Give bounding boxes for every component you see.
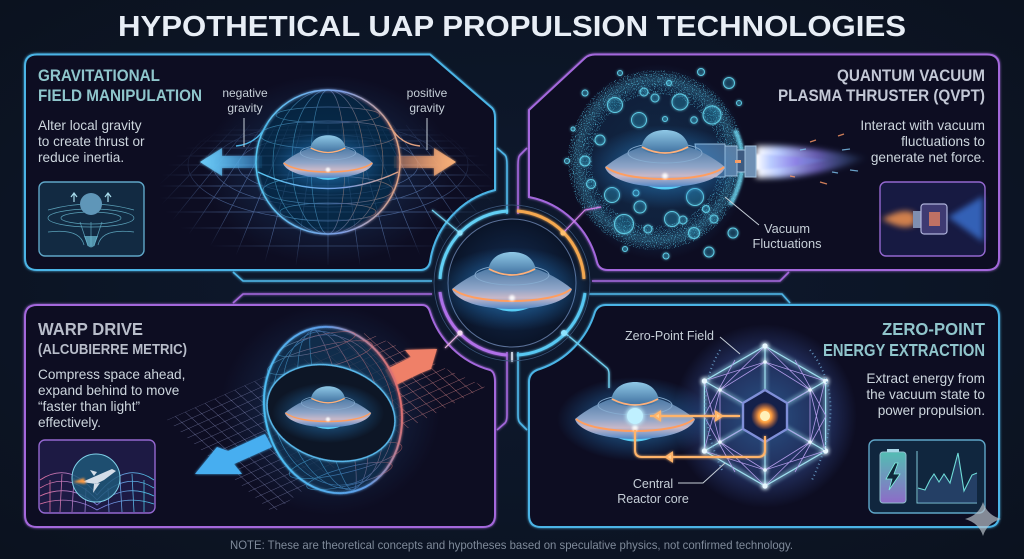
panel: gravitational field manipulation: [22, 52, 498, 273]
heading: [38, 67, 202, 105]
inset: warp bubble ship: [39, 440, 155, 513]
label: positive gravity: positive: [407, 86, 448, 100]
arc: purple lower left: [440, 292, 507, 355]
inset: thruster: [880, 182, 985, 256]
panel: warp drive: [25, 305, 495, 527]
sparkle mark: [965, 502, 1001, 536]
title: HYPOTHETICAL UAP PROPULSION TECHNOLOGIES: [118, 11, 906, 43]
description: Alter local gravity: [38, 118, 142, 133]
plasma plume: [756, 134, 868, 184]
description: effectively.: [38, 415, 101, 430]
gravity sphere: [236, 90, 420, 234]
craft: [557, 377, 713, 461]
label: negative gravity: negative: [222, 86, 268, 100]
description: reduce inertia.: [38, 150, 124, 165]
description: Extract energy from: [866, 371, 985, 386]
inset: gravity well: [39, 182, 144, 256]
panel frame: [25, 54, 495, 270]
label: vacuum fluctuations: [725, 197, 822, 251]
label: zero-point field: [625, 329, 740, 354]
description: [866, 371, 985, 418]
connector lines around the hub: [233, 148, 800, 430]
description: Compress space ahead,: [38, 367, 185, 382]
central hub: [432, 205, 601, 361]
description: [38, 367, 185, 430]
connector wire: [565, 333, 609, 388]
panel: zero-point energy extraction: [529, 305, 999, 527]
heading: [823, 319, 985, 360]
inset: battery and power chart: [869, 440, 985, 513]
particle cloud: [568, 64, 748, 260]
arrow: backward: [195, 434, 272, 474]
panel frame: [529, 54, 999, 270]
haze: [203, 75, 453, 265]
arrow: positive gravity: [394, 148, 456, 176]
label: positive gravity: gravity: [409, 101, 445, 115]
craft: [270, 132, 386, 194]
energy flow arrows: [635, 412, 765, 461]
panel: quantum vacuum plasma thruster: [529, 54, 999, 270]
label: positive gravity: [407, 86, 448, 150]
central craft: [434, 247, 590, 331]
thruster nozzle: [695, 144, 756, 177]
arc: cyan upper left: [440, 211, 508, 279]
description: generate net force.: [871, 150, 985, 165]
arrow: forward: [385, 349, 437, 386]
description: [860, 118, 985, 165]
warp bubble: [247, 312, 419, 508]
label: negative gravity: gravity: [227, 101, 263, 115]
arc: cyan lower right: [517, 293, 585, 355]
heading: PLASMA THRUSTER (QVPT): [778, 87, 985, 105]
heading: FIELD MANIPULATION: [38, 87, 202, 105]
label: central reactor core: [617, 463, 725, 506]
description: to create thrust or: [38, 134, 145, 149]
reactor core: [743, 390, 787, 442]
description: [38, 118, 145, 165]
panel frame: [529, 305, 999, 527]
heading: ENERGY EXTRACTION: [823, 340, 985, 360]
outer thin ring: [434, 205, 590, 361]
vacuum bubbles: [564, 68, 742, 259]
craft: [272, 383, 384, 443]
label: zero-point field: Zero-Point Field: [625, 329, 714, 343]
arrow: negative gravity: [200, 148, 262, 176]
heading: QUANTUM VACUUM: [837, 67, 985, 85]
heading: ZERO-POINT: [882, 319, 985, 339]
grid plane: [166, 123, 490, 264]
haze: [220, 305, 440, 515]
description: expand behind to move: [38, 383, 179, 398]
description: power propulsion.: [878, 403, 985, 418]
description: Interact with vacuum: [860, 118, 985, 133]
hub disc: [448, 219, 576, 347]
description: “faster than light”: [38, 399, 140, 414]
label: vacuum fluctuations: Fluctuations: [752, 236, 822, 251]
footnote: NOTE: These are theoretical concepts and hypotheses based on speculative physics, not confirmed technology.: [230, 538, 793, 552]
description: the vacuum state to: [866, 387, 985, 402]
heading: [778, 67, 985, 105]
label: central reactor core: Reactor core: [617, 492, 689, 506]
label: negative gravity: [222, 86, 268, 147]
zero-point hexagon lattice: [673, 324, 857, 508]
heading: GRAVITATIONAL: [38, 67, 160, 85]
heading: (ALCUBIERRE METRIC): [38, 342, 187, 358]
bubble opening: [256, 351, 406, 475]
label: vacuum fluctuations: Vacuum: [764, 221, 810, 236]
description: fluctuations to: [901, 134, 985, 149]
arc: orange upper right: [517, 211, 584, 279]
heading: [38, 319, 187, 358]
heading: WARP DRIVE: [38, 319, 143, 339]
label: central reactor core: Central: [633, 477, 673, 491]
warped grid plane: [167, 332, 485, 513]
panel frame: [25, 305, 495, 527]
craft: [587, 125, 743, 209]
ship reactor: [627, 408, 643, 424]
connector nodes: [432, 207, 601, 348]
